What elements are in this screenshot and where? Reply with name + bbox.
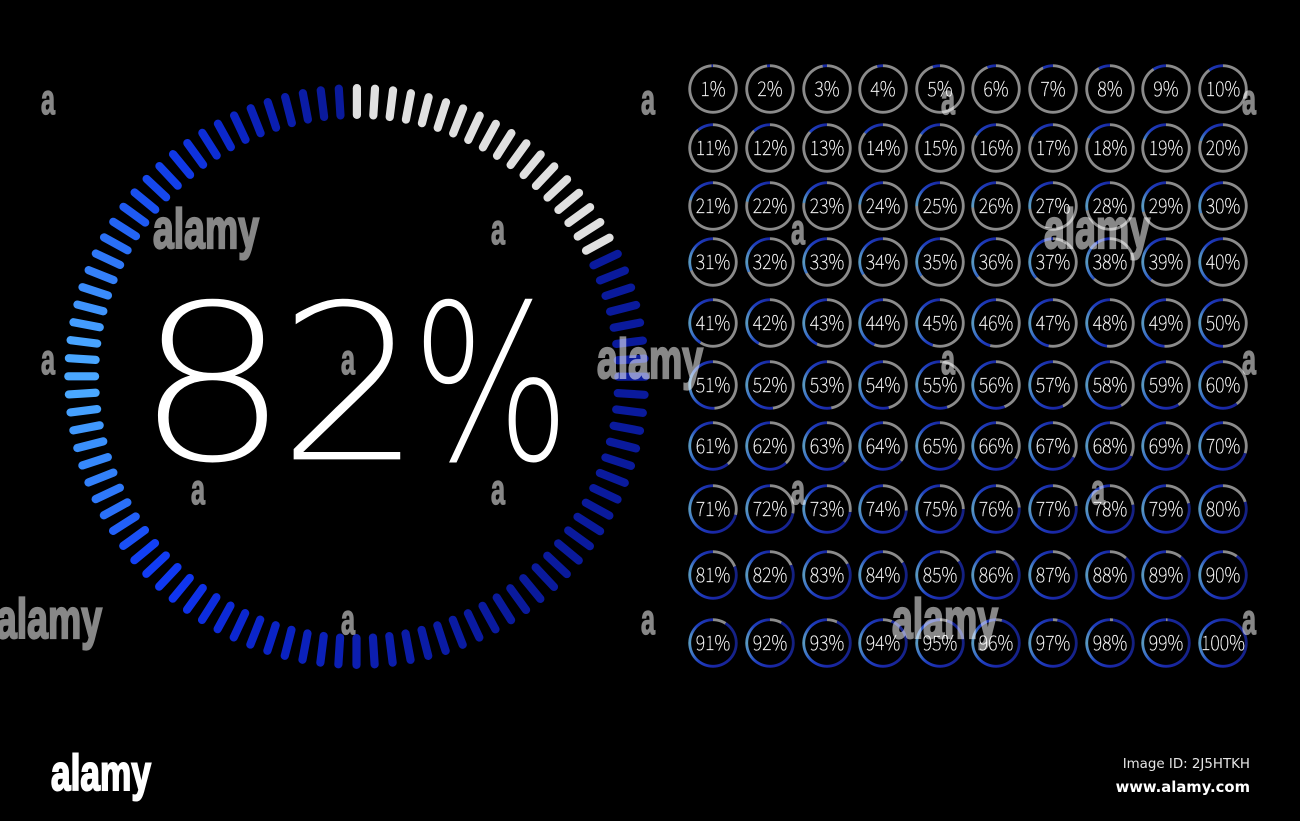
small watermark letters: a [791, 206, 806, 254]
gauge 54%: 54% [866, 368, 900, 398]
gauge 70%: 70% [1205, 430, 1240, 458]
gauge 60%: 60% [1205, 368, 1240, 398]
gauge 63%: 63% [809, 430, 844, 458]
gauge 72%: 72% [753, 492, 787, 522]
gauge 8%: 8% [1097, 72, 1122, 102]
gauge 3%: 3% [814, 72, 839, 102]
gauge 94%: 94% [866, 627, 900, 656]
gauge 55%: 55% [922, 368, 957, 398]
gauge 46%: 46% [979, 306, 1014, 336]
gauge 62%: 62% [753, 430, 787, 458]
gauge 86%: 86% [979, 559, 1014, 588]
small watermark letters: a [341, 336, 356, 384]
gauge 93%: 93% [809, 627, 844, 656]
small watermark letters: a [641, 596, 656, 644]
gauge 87%: 87% [1036, 559, 1070, 588]
gauge 64%: 64% [866, 430, 900, 458]
gauge 95%: 95% [922, 627, 957, 656]
gauge 77%: 77% [1036, 492, 1070, 522]
image id: Image ID: 2J5HTKH [1123, 757, 1250, 772]
gauge 29%: 29% [1149, 190, 1183, 218]
gauge 11%: 11% [696, 132, 731, 160]
gauge 97%: 97% [1036, 627, 1070, 656]
small watermark letters [41, 76, 1257, 644]
gauge 21%: 21% [696, 190, 731, 218]
gauge 10%: 10% [1205, 72, 1240, 102]
gauge 9%: 9% [1153, 72, 1179, 102]
gauge 5%: 5% [927, 72, 952, 102]
gauge 88%: 88% [1092, 559, 1127, 588]
small watermark letters: a [941, 76, 956, 124]
gauge 57%: 57% [1036, 368, 1070, 398]
gauge 35%: 35% [922, 246, 957, 274]
gauge 100%: 100% [1201, 627, 1245, 656]
logo: alamy [51, 745, 151, 801]
gauge 7%: 7% [1040, 72, 1066, 102]
gauge 17%: 17% [1036, 132, 1070, 160]
gauge 37%: 37% [1036, 246, 1070, 274]
gauge 71%: 71% [696, 492, 731, 522]
small watermark letters: a [791, 466, 806, 514]
gauge 99%: 99% [1149, 627, 1183, 656]
gauge 12%: 12% [753, 132, 787, 160]
small watermark letters: a [1242, 336, 1257, 384]
big value 82% [134, 259, 571, 512]
gauge 92%: 92% [753, 627, 787, 656]
gauge 20%: 20% [1205, 132, 1240, 160]
website: www.alamy.com [1116, 779, 1250, 796]
gauge 85%: 85% [922, 559, 957, 588]
gauge 65%: 65% [922, 430, 957, 458]
gauge 75%: 75% [922, 492, 957, 522]
ring of 100 ticks [64, 84, 649, 669]
large watermark words: alamy [597, 327, 703, 390]
gauge 44%: 44% [866, 306, 900, 336]
small watermark letters: a [191, 466, 206, 514]
gauge 49%: 49% [1149, 306, 1183, 336]
gauge 80%: 80% [1205, 492, 1240, 522]
gauge 73%: 73% [809, 492, 844, 522]
gauge 18%: 18% [1092, 132, 1127, 160]
gauge 74%: 74% [866, 492, 900, 522]
gauge 50%: 50% [1205, 306, 1240, 336]
gauge 52%: 52% [753, 368, 787, 398]
gauge 76%: 76% [979, 492, 1014, 522]
small watermark letters: a [41, 336, 56, 384]
gauge 6%: 6% [984, 72, 1009, 102]
big value 82%: 8 [134, 259, 291, 512]
gauge 79%: 79% [1149, 492, 1183, 522]
gauge 90%: 90% [1205, 559, 1240, 588]
gauge 4%: 4% [870, 72, 896, 102]
gauge 30%: 30% [1205, 190, 1240, 218]
gauge 22%: 22% [753, 190, 787, 218]
gauge 58%: 58% [1092, 368, 1127, 398]
gauge 47%: 47% [1036, 306, 1070, 336]
gauge 40%: 40% [1205, 246, 1240, 274]
gauge 34%: 34% [866, 246, 900, 274]
small watermark letters: a [941, 336, 956, 384]
large watermark words: alamy [1044, 197, 1150, 260]
gauge 84%: 84% [866, 559, 900, 588]
gauge 45%: 45% [922, 306, 957, 336]
gauge 33%: 33% [809, 246, 844, 274]
gauge 56%: 56% [979, 368, 1014, 398]
small watermark letters: a [1242, 76, 1257, 124]
grid of 100 small percentage gauges [688, 64, 1248, 668]
small watermark letters: a [1091, 466, 1106, 514]
gauge 31%: 31% [696, 246, 731, 274]
gauge 48%: 48% [1092, 306, 1127, 336]
gauge 38%: 38% [1092, 246, 1127, 274]
gauge 69%: 69% [1149, 430, 1183, 458]
gauge 25%: 25% [922, 190, 957, 218]
small watermark letters: a [491, 206, 506, 254]
gauge 83%: 83% [809, 559, 844, 588]
gauge 27%: 27% [1036, 190, 1070, 218]
large watermark words [0, 197, 1150, 650]
big value 82%: % [411, 259, 571, 512]
big value 82%: 2 [277, 259, 424, 512]
gauge 42%: 42% [753, 306, 787, 336]
gauge 26%: 26% [979, 190, 1014, 218]
gauge 68%: 68% [1092, 430, 1127, 458]
gauge 96%: 96% [979, 627, 1014, 656]
gauge 98%: 98% [1092, 627, 1127, 656]
gauge 19%: 19% [1149, 132, 1183, 160]
gauge 81%: 81% [696, 559, 731, 588]
large watermark words: alamy [0, 587, 102, 650]
small watermark letters: a [1242, 596, 1257, 644]
gauge 91%: 91% [696, 627, 731, 656]
large watermark words: alamy [153, 197, 259, 260]
gauge 32%: 32% [753, 246, 787, 274]
small watermark letters: a [341, 596, 356, 644]
gauge 1%: 1% [701, 72, 726, 102]
gauge 82%: 82% [753, 559, 787, 588]
gauge 67%: 67% [1036, 430, 1070, 458]
gauge 23%: 23% [809, 190, 844, 218]
large watermark words: alamy [892, 587, 998, 650]
small watermark letters: a [41, 76, 56, 124]
gauge 78%: 78% [1092, 492, 1127, 522]
small watermark letters: a [491, 466, 506, 514]
gauge 36%: 36% [979, 246, 1014, 274]
gauge 24%: 24% [866, 190, 900, 218]
gauge 53%: 53% [809, 368, 844, 398]
gauge 89%: 89% [1149, 559, 1183, 588]
gauge 28%: 28% [1092, 190, 1127, 218]
gauge 51%: 51% [696, 368, 731, 398]
gauge 13%: 13% [809, 132, 844, 160]
small watermark letters: a [641, 76, 656, 124]
gauge 41%: 41% [696, 306, 731, 336]
gauge 2%: 2% [757, 72, 783, 102]
gauge 16%: 16% [979, 132, 1014, 160]
gauge 15%: 15% [922, 132, 957, 160]
gauge 39%: 39% [1149, 246, 1183, 274]
gauge 59%: 59% [1149, 368, 1183, 398]
gauge 43%: 43% [809, 306, 844, 336]
gauge 61%: 61% [696, 430, 731, 458]
gauge 66%: 66% [979, 430, 1014, 458]
gauge 14%: 14% [866, 132, 900, 160]
